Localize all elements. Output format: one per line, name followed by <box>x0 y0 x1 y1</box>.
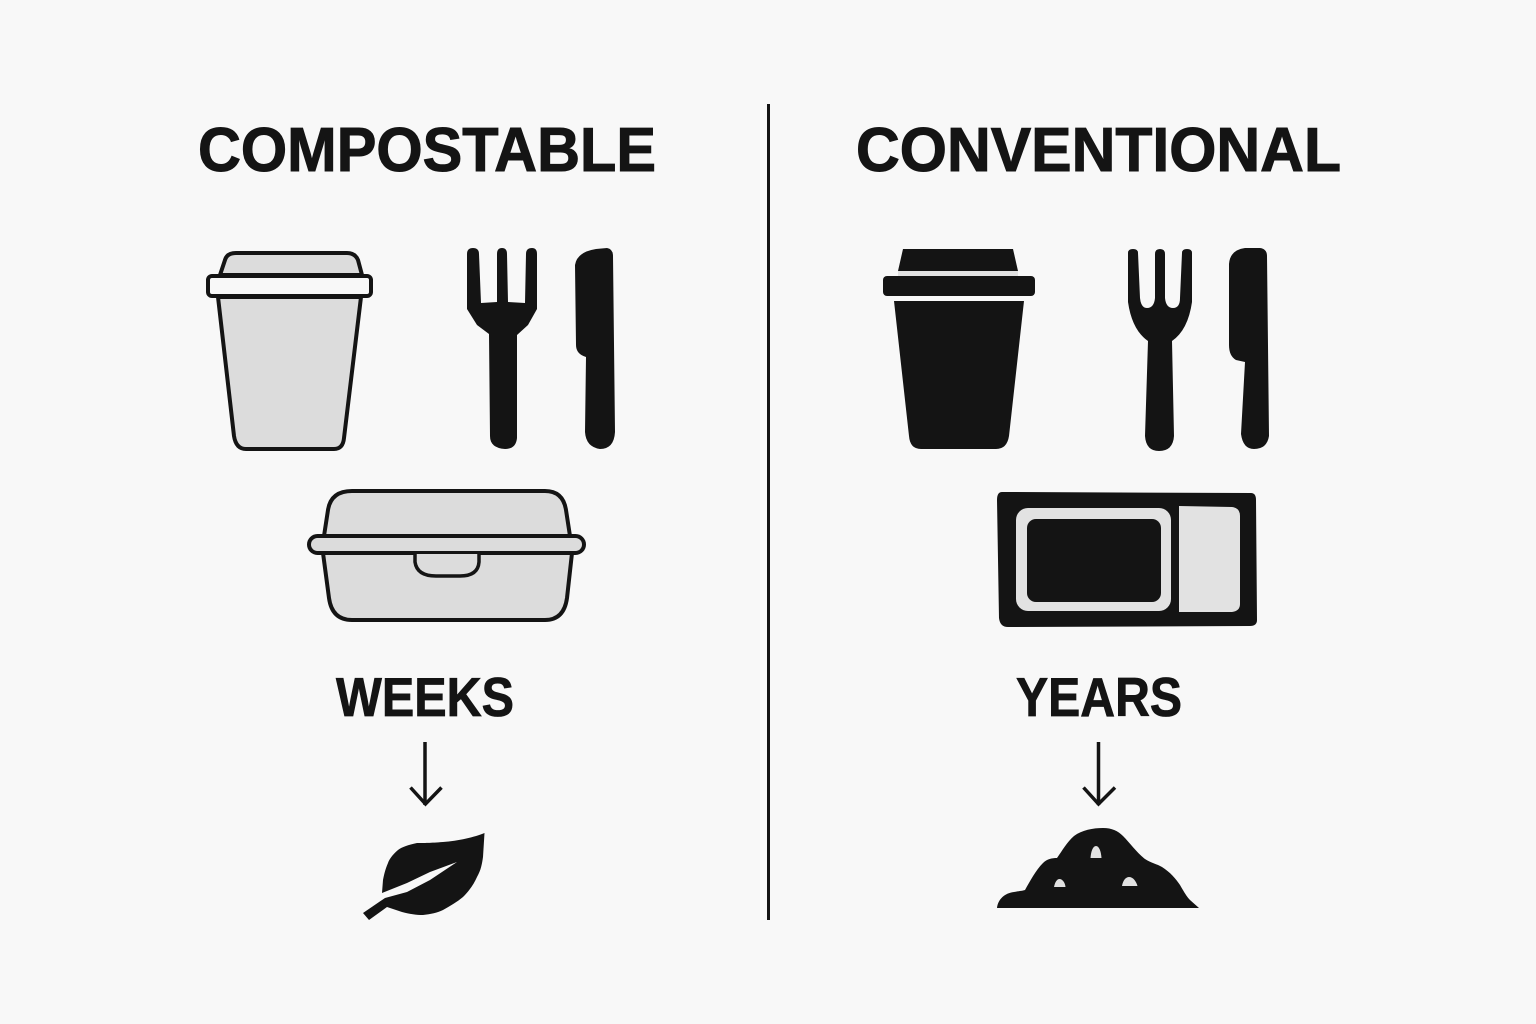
label: years: YEARS <box>1016 666 1182 728</box>
label: weeks: WEEKS <box>336 666 514 728</box>
icon: compostable knife <box>575 248 615 449</box>
heading: conventional: CONVENTIONAL <box>856 116 1341 185</box>
arrow: years to waste pile <box>1084 742 1115 805</box>
heading: compostable: COMPOSTABLE <box>198 116 656 185</box>
icon: waste pile <box>997 828 1199 908</box>
icon: conventional knife <box>1229 248 1269 449</box>
arrow: weeks to leaf <box>410 742 442 805</box>
icon: leaf <box>363 833 484 920</box>
panel: compostable <box>198 116 656 920</box>
icon: conventional fork <box>1128 249 1192 451</box>
icon: conventional cup <box>883 249 1035 449</box>
icon: conventional tray <box>997 492 1257 627</box>
panel: conventional <box>856 116 1341 908</box>
icon: compostable clamshell box <box>309 491 584 620</box>
icon: compostable fork <box>467 248 537 449</box>
icon: compostable cup <box>208 253 371 449</box>
